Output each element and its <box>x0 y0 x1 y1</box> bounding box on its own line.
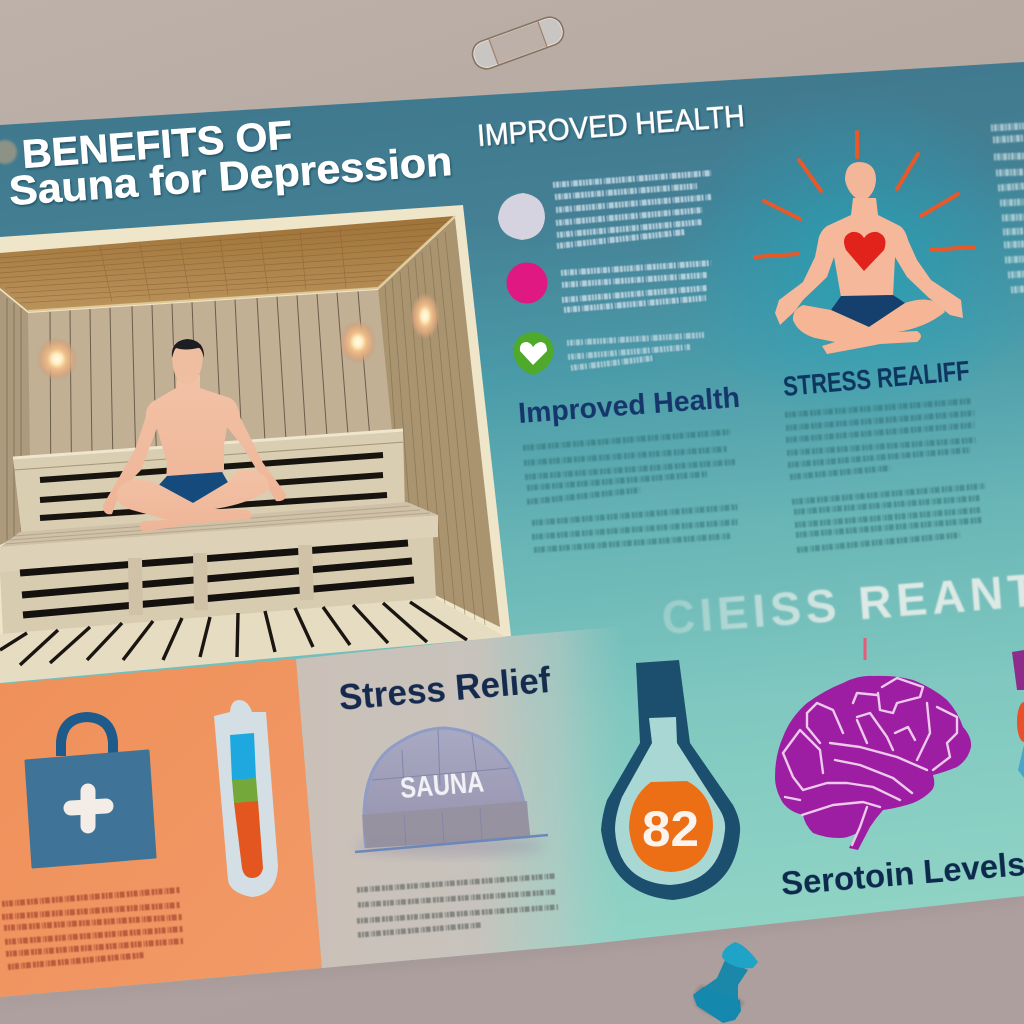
floor slats <box>0 598 506 683</box>
text block: improved health <box>523 432 738 550</box>
seat surface <box>0 502 438 572</box>
glow behind meditating figure <box>670 90 1024 430</box>
wall lamps <box>36 292 440 381</box>
heading: stress realiff: STRESS REALIFF <box>782 355 971 402</box>
heading: stress relief: Stress Relief <box>337 659 553 718</box>
title: BENEFITS OF <box>20 113 294 177</box>
heading: serotonin levels: Serotoin Levels <box>780 845 1024 902</box>
panel: orange health kit <box>0 659 322 997</box>
left wall <box>0 290 30 545</box>
icon: medical bag <box>26 717 155 867</box>
icon: test tube <box>214 700 278 897</box>
dome label: SAUNA <box>399 766 485 805</box>
icon: green heart badge <box>513 332 554 375</box>
icon: purple brain <box>775 676 971 850</box>
icon: lavender circle <box>498 193 545 240</box>
man legs <box>117 469 269 532</box>
panel: sauna illustration <box>0 205 511 683</box>
icon: sauna dome <box>355 728 548 856</box>
radiating orange rays <box>755 132 974 257</box>
paper clip <box>469 14 567 72</box>
icon: cropped figure at right edge <box>1012 650 1024 778</box>
icon: pink tick above brain <box>864 638 866 660</box>
man head <box>172 340 203 384</box>
figure head <box>845 162 876 202</box>
icon: magenta circle <box>506 262 548 304</box>
sauna frame <box>0 205 511 682</box>
man arms and torso <box>103 375 286 514</box>
man shorts <box>158 472 229 503</box>
text block: third benefit <box>567 335 704 368</box>
figure legs <box>793 300 945 354</box>
upper bench <box>13 430 405 538</box>
poster shadow on desk <box>0 892 1024 1003</box>
meditating figure with heart <box>755 132 974 354</box>
back wall <box>13 290 392 465</box>
right wall <box>378 218 500 627</box>
heading: improved health top: IMPROVED HEALTH <box>476 98 746 153</box>
figure heart <box>844 232 885 271</box>
sauna ceiling <box>0 216 455 311</box>
panel: gray sauna dome <box>296 626 665 968</box>
man meditating in sauna <box>103 339 286 532</box>
text block: second benefit <box>561 263 711 310</box>
push pin <box>693 942 758 1023</box>
text block: stress relief <box>785 401 985 550</box>
right edge text column <box>991 126 1024 290</box>
faint mark at left edge <box>0 140 17 164</box>
lower bench slats <box>0 537 436 634</box>
icon: flask with 82 <box>601 660 740 900</box>
man hair <box>172 339 204 358</box>
title: Sauna for Depression <box>7 138 454 214</box>
text block: gray panel <box>357 876 558 935</box>
figure torso and arms <box>775 198 963 325</box>
figure shorts <box>831 295 905 327</box>
heading: improved health: Improved Health <box>517 382 741 430</box>
text block: first benefit <box>553 173 711 246</box>
flask number: 82 <box>642 801 699 857</box>
text block: orange panel <box>2 890 183 967</box>
